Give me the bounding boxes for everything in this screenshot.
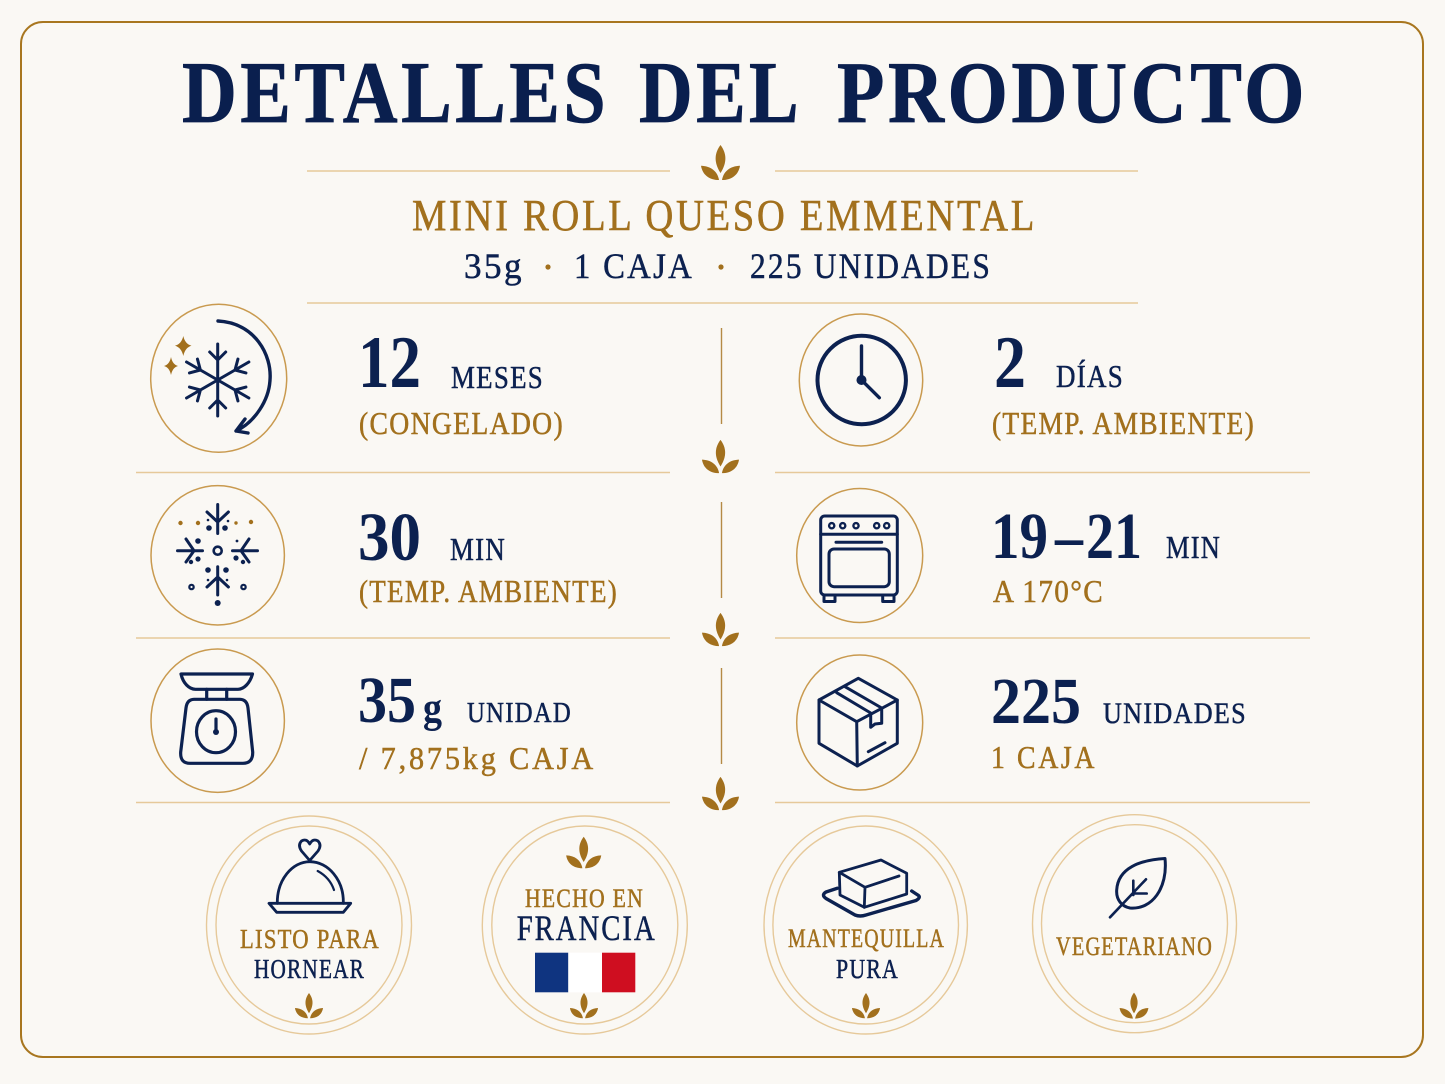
- text: 2 dias temp ambiente: 2: [994, 322, 1026, 404]
- badge: listo para hornear: LISTO PARA: [240, 924, 380, 954]
- badge: mantequilla pura: [764, 816, 967, 1034]
- subtitle: format details: 1 CAJA: [574, 246, 694, 286]
- badge: mantequilla pura: MANTEQUILLA: [788, 924, 945, 953]
- text: 35g unidad caja weight: [358, 664, 596, 776]
- text: 19-21 min a 170C: –: [1054, 500, 1084, 573]
- subtitle: format details: 35g: [464, 246, 524, 286]
- text: 225 unidades 1 caja: 225: [991, 665, 1081, 738]
- text: 12 meses congelado: [358, 322, 564, 441]
- badge: hecho en francia: HECHO EN: [525, 884, 644, 913]
- text: 35g unidad caja weight: / 7,875kg CAJA: [359, 740, 596, 776]
- badge: listo para hornear: HORNEAR: [254, 954, 365, 984]
- text: 12 meses congelado: (CONGELADO): [359, 405, 564, 441]
- title: PRODUCTO: [837, 45, 1308, 142]
- text: 2 dias temp ambiente: DÍAS: [1056, 358, 1124, 394]
- text: 30 min temp ambiente: 30: [358, 499, 421, 575]
- title: DETALLES: [182, 45, 609, 142]
- text: 225 unidades 1 caja: [991, 665, 1247, 775]
- text: 30 min temp ambiente: (TEMP. AMBIENTE): [359, 573, 618, 609]
- text: 35g unidad caja weight: 35: [358, 664, 416, 737]
- badge: vegetariano: [1032, 815, 1236, 1033]
- icon: oven: [797, 488, 923, 622]
- text: 12 meses congelado: 12: [358, 322, 421, 404]
- badge: hecho en francia: [482, 816, 687, 1034]
- text: 225 unidades 1 caja: 1 CAJA: [991, 739, 1097, 775]
- badge: mantequilla pura: PURA: [836, 954, 899, 984]
- text: 19-21 min a 170C: [991, 500, 1221, 609]
- icon: title leaf ornament: [701, 145, 740, 180]
- text: 225 unidades 1 caja: UNIDADES: [1103, 697, 1247, 730]
- badge: listo para hornear: [206, 816, 412, 1034]
- icon: kitchen scale: [151, 649, 284, 792]
- title: DEL: [639, 45, 802, 142]
- icon: frozen snowflake with arrow: [151, 304, 287, 452]
- text: 30 min temp ambiente: [358, 499, 618, 609]
- text: 30 min temp ambiente: MIN: [450, 531, 506, 567]
- title: [182, 45, 1308, 142]
- text: 35g unidad caja weight: g: [423, 686, 442, 732]
- text: 2 dias temp ambiente: [992, 322, 1255, 441]
- text: 19-21 min a 170C: A 170°C: [993, 573, 1104, 609]
- icon: row leaf ornament 1: [702, 440, 739, 473]
- icon: row leaf ornament 3: [702, 777, 739, 810]
- icon: clock: [799, 314, 923, 446]
- subtitle: format details: 225 UNIDADES: [750, 246, 992, 286]
- icon: thawing snowflakes: [151, 486, 284, 625]
- text: 19-21 min a 170C: 19: [991, 500, 1048, 573]
- text: 19-21 min a 170C: MIN: [1166, 529, 1221, 565]
- subtitle: product name: MINI ROLL QUESO EMMENTAL: [412, 191, 1037, 240]
- subtitle: format details: [464, 246, 992, 286]
- text: 35g unidad caja weight: UNIDAD: [467, 697, 572, 729]
- text: 12 meses congelado: MESES: [451, 359, 544, 395]
- icon: row leaf ornament 2: [702, 613, 739, 646]
- text: 19-21 min a 170C: 21: [1086, 500, 1142, 573]
- text: 2 dias temp ambiente: (TEMP. AMBIENTE): [992, 405, 1255, 441]
- badge: hecho en francia: FRANCIA: [517, 908, 657, 948]
- badge: vegetariano: VEGETARIANO: [1056, 932, 1213, 961]
- icon: cardboard box: [797, 655, 923, 790]
